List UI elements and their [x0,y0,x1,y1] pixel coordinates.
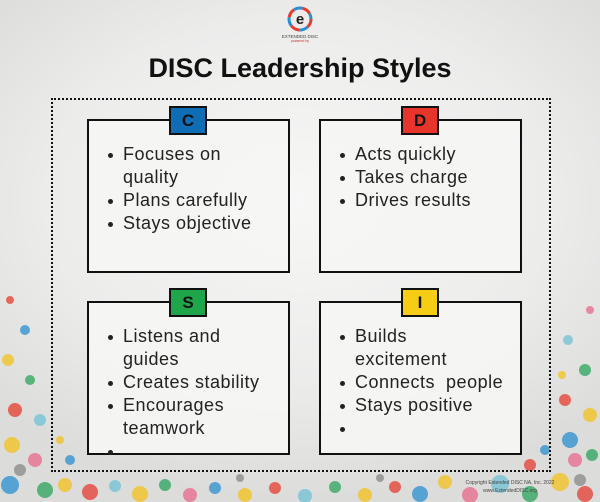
panel: D: Takes charge [355,167,468,187]
badge D [401,106,439,135]
panel: D [319,119,522,273]
dotted frame [51,98,551,472]
panel: S: guides [123,349,179,369]
logo: e [296,11,304,28]
badge C: C [182,111,194,130]
panel: I [319,301,522,455]
footer copyright: Copyright Extended DISC NA, Inc. 2022 [466,480,554,486]
title: DISC Leadership Styles [148,53,452,83]
panel: D: Drives results [355,190,471,210]
panel: C: Plans carefully [123,190,248,210]
badge C [169,106,207,135]
logo [282,6,318,43]
panel: I: Connects people [355,372,503,392]
panel: C: Stays objective [123,213,252,233]
panel: C [87,119,290,273]
badge D: D [414,111,426,130]
badge S: S [182,293,194,312]
panel: S [87,301,290,455]
panel: D: Acts quickly [355,144,456,164]
panel: S: Creates stability [123,372,260,392]
footer copyright [466,480,554,494]
panel: I: Stays positive [355,395,473,415]
badge S [169,288,207,317]
panel: C: Focuses on [123,144,221,164]
badge I [401,288,439,317]
logo: powered by [291,39,309,43]
panel: S: Encourages [123,395,224,415]
logo: EXTENDED DISC [282,34,318,39]
panel: C: quality [123,167,179,187]
panel: S: teamwork [123,418,205,438]
panel: S: Listens and [123,326,221,346]
badge I: I [418,293,422,312]
footer copyright: www.ExtendedDISC.org [483,488,537,494]
panel: I: Builds [355,326,407,346]
panel: I: excitement [355,349,447,369]
